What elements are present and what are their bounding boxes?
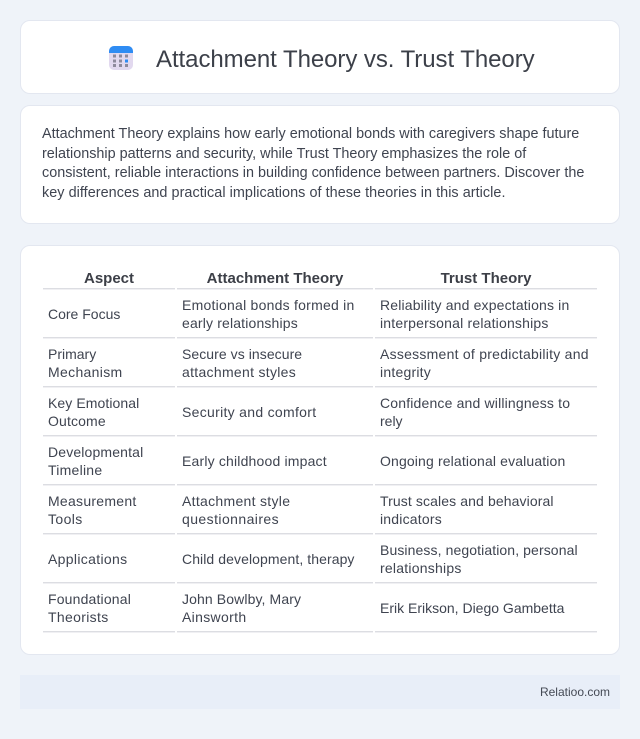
header: trust theory: Trust Theory [441,270,531,287]
intro text: relationship patterns and security, while Trust Theory emphasizes the role of [42,146,526,162]
comparison table: Child development, therapy [182,551,355,567]
comparison table: indicators [380,511,442,527]
comparison table: Business, negotiation, personal [380,542,578,558]
comparison table: Secure vs insecure [182,346,302,362]
row: foundational theorists: Theorists [48,609,109,625]
comparison table: Assessment of predictability and [380,346,589,362]
intro text [42,126,584,201]
title card [20,20,620,94]
row: primary mechanism: Primary [48,346,96,362]
intro card [20,105,620,224]
comparison table: Early childhood impact [182,453,327,469]
intro text: consistent, reliable interactions in building confidence between partners. Discover the [42,165,584,181]
footer text: Relatioo.com [540,685,610,699]
row: applications: Applications [48,551,127,567]
intro text: Attachment Theory explains how early emotional bonds with caregivers shape future [42,126,579,142]
row: core focus: Core Focus [48,306,120,322]
row: measurement tools [48,493,137,527]
footer bar [20,675,620,709]
icon: calendar [109,46,133,70]
comparison table: Ongoing relational evaluation [380,453,565,469]
comparison table: early relationships [182,315,298,331]
row: key emotional outcome [48,395,139,429]
title: Attachment Theory vs. Trust Theory [156,46,535,73]
comparison table: Security and comfort [182,404,316,420]
comparison table: interpersonal relationships [380,315,549,331]
comparison table: questionnaires [182,511,279,527]
comparison table: Attachment style [182,493,290,509]
row: developmental timeline: Developmental [48,444,143,460]
comparison table: integrity [380,364,431,380]
row: measurement tools: Measurement [48,493,137,509]
row: developmental timeline: Timeline [48,462,102,478]
comparison table: Confidence and willingness to [380,395,570,411]
row: primary mechanism [48,346,123,380]
intro text: key differences and practical implications of these theories in this article. [42,185,506,201]
comparison table: Trust scales and behavioral [380,493,554,509]
row: foundational theorists: Foundational [48,591,131,607]
row: key emotional outcome: Outcome [48,413,106,429]
comparison table: John Bowlby, Mary [182,591,301,607]
header: aspect: Aspect [84,270,134,287]
row: key emotional outcome: Key Emotional [48,395,139,411]
comparison table: Emotional bonds formed in [182,297,355,313]
comparison table: attachment styles [182,364,296,380]
row: primary mechanism: Mechanism [48,364,123,380]
row: developmental timeline [48,444,143,478]
comparison table: Ainsworth [182,609,246,625]
row: foundational theorists [48,591,131,625]
comparison table: Reliability and expectations in [380,297,569,313]
table card [20,245,620,655]
row: measurement tools: Tools [48,511,83,527]
comparison table: relationships [380,560,462,576]
comparison table: Erik Erikson, Diego Gambetta [380,600,564,616]
header: attachment theory: Attachment Theory [207,270,343,287]
comparison table: rely [380,413,403,429]
